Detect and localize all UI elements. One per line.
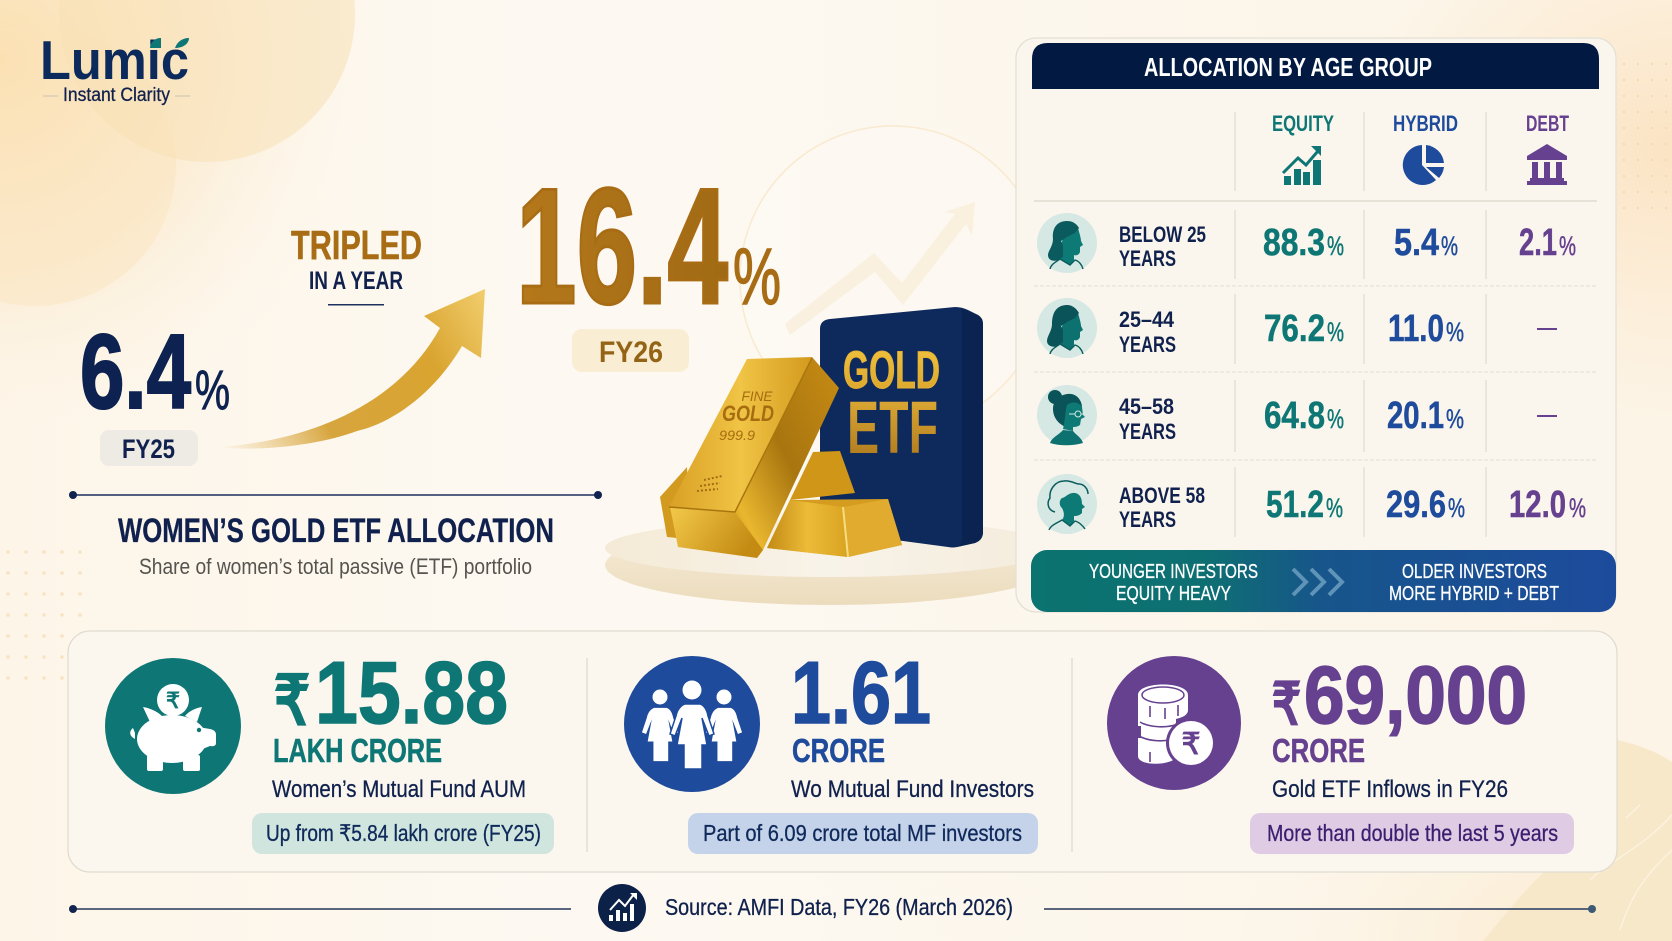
panel heading: ALLOCATION BY AGE GROUP <box>1144 52 1432 82</box>
banner: younger vs older investors: EQUITY HEAVY <box>1116 582 1231 605</box>
stat: women's mutual fund AUM: Women’s Mutual Fund AUM <box>272 776 526 803</box>
stat: 6.4% FY25: % <box>195 358 230 421</box>
stat: women mutual fund investors: CRORE <box>792 732 885 769</box>
row: below 25 years: % <box>1441 231 1458 261</box>
footer: source: Source: AMFI Data, FY26 (March 2026) <box>665 894 1013 920</box>
gold bar: back left <box>660 467 690 538</box>
book: gold ETF: GOLD <box>843 341 940 400</box>
row: 25-44 years: 25–44 <box>1119 307 1175 332</box>
stat: women's mutual fund AUM: 15.88 <box>315 643 508 742</box>
stat: 16.4% FY26: FY26 <box>599 336 663 369</box>
row: 45-58 years: YEARS <box>1119 419 1176 444</box>
row: below 25 years: 2.1 <box>1519 222 1557 264</box>
stat: women mutual fund investors: Part of 6.09 crore total MF investors <box>703 820 1022 846</box>
banner: younger vs older investors <box>1031 550 1616 612</box>
row: 45-58 years: 20.1 <box>1387 395 1444 437</box>
heading: women's gold ETF allocation: WOMEN’S GOLD ETF ALLOCATION <box>118 512 554 550</box>
stat: women's mutual fund AUM <box>105 643 554 854</box>
callout: tripled in a year: IN A YEAR <box>309 267 403 295</box>
stat: gold ETF inflows: 69,000 <box>1304 650 1527 741</box>
row: below 25 years: 5.4 <box>1394 222 1439 264</box>
banner: younger vs older investors: MORE HYBRID + DEBT <box>1389 582 1559 605</box>
row: 45-58 years: 45–58 <box>1119 394 1174 419</box>
icon: three women <box>624 656 760 792</box>
row: above 58 years: 51.2 <box>1266 484 1324 526</box>
stat: women mutual fund investors: Wo Mutual Fund Investors <box>791 776 1034 803</box>
row: 45-58 years: % <box>1446 404 1464 434</box>
avatar: adult woman <box>1037 298 1097 358</box>
gold bar: main: GOLD <box>722 401 774 426</box>
avatar: young woman <box>1037 213 1097 273</box>
gold bar: lower <box>767 499 902 557</box>
row: below 25 years: % <box>1327 231 1344 261</box>
column header: debt: DEBT <box>1526 111 1569 136</box>
heading: women's gold ETF allocation <box>69 491 602 579</box>
stat: women's mutual fund AUM: ₹ <box>274 663 310 739</box>
row: above 58 years: 12.0 <box>1509 484 1566 526</box>
row: 45-58 years: 64.8 <box>1264 395 1325 437</box>
illustration: faint growth arrow in halo <box>740 126 1046 432</box>
icon: piggy bank: ₹ <box>166 688 180 713</box>
column header: hybrid <box>1393 111 1458 185</box>
row: above 58 years: % <box>1448 493 1465 523</box>
icon: coin stack <box>1107 656 1241 790</box>
gold bar: main: 999.9 <box>719 427 755 443</box>
stat: gold ETF inflows: More than double the last 5 years <box>1267 820 1558 846</box>
row: 25-44 years <box>1037 298 1557 358</box>
row: below 25 years: % <box>1559 231 1576 261</box>
footer: source <box>69 884 1596 932</box>
avatar: woman with bun and glasses <box>1037 385 1097 445</box>
book: gold ETF <box>820 307 983 548</box>
panel: key figures <box>68 631 1617 872</box>
row: above 58 years <box>1037 474 1586 534</box>
stat: 16.4% FY26: % <box>733 232 781 321</box>
arrow: growth <box>217 289 485 449</box>
column header: equity <box>1272 111 1334 185</box>
stat: gold ETF inflows <box>1107 650 1574 854</box>
row: 25-44 years: % <box>1446 317 1464 347</box>
stat: 6.4% FY25: FY25 <box>122 434 175 464</box>
column header: debt <box>1526 111 1569 185</box>
avatar: older woman <box>1037 474 1097 534</box>
row: 25-44 years: % <box>1327 317 1344 347</box>
row: above 58 years: ABOVE 58 <box>1119 483 1205 508</box>
banner: younger vs older investors: YOUNGER INVESTORS <box>1089 560 1258 583</box>
row: 25-44 years: 11.0 <box>1388 308 1444 350</box>
logo: Lumic <box>40 29 189 91</box>
row: below 25 years: 88.3 <box>1263 222 1325 264</box>
row: above 58 years: YEARS <box>1119 507 1176 532</box>
icon: coin stack: ₹ <box>1181 728 1201 761</box>
banner: younger vs older investors: OLDER INVESTORS <box>1402 560 1547 583</box>
row: below 25 years: YEARS <box>1119 246 1176 271</box>
gold bar: main <box>669 357 839 558</box>
row: 25-44 years: 76.2 <box>1264 308 1325 350</box>
gold bar: small upper <box>790 451 855 500</box>
arrow: chevrons <box>1293 569 1342 595</box>
stat: women's mutual fund AUM: LAKH CRORE <box>273 732 442 769</box>
column header: hybrid: HYBRID <box>1393 111 1458 136</box>
row: above 58 years: 29.6 <box>1386 484 1446 526</box>
row: above 58 years: % <box>1569 493 1586 523</box>
row: below 25 years: BELOW 25 <box>1119 222 1206 247</box>
stat: gold ETF inflows: CRORE <box>1272 732 1365 769</box>
stat: gold ETF inflows: Gold ETF Inflows in FY26 <box>1272 776 1508 803</box>
panel heading <box>1032 43 1599 89</box>
row: 45-58 years <box>1037 385 1557 445</box>
stat: women's mutual fund AUM: Up from ₹5.84 lakh crore (FY25) <box>266 820 541 846</box>
stat: 6.4% FY25: 6.4 <box>80 313 191 431</box>
row: below 25 years <box>1037 213 1576 273</box>
stat: women mutual fund investors <box>624 643 1038 854</box>
panel: allocation by age group <box>1016 38 1616 612</box>
stat: 16.4% FY26: 16.4 <box>516 154 728 338</box>
stat: gold ETF inflows: ₹ <box>1272 672 1301 737</box>
row: above 58 years: % <box>1326 493 1343 523</box>
stat: women mutual fund investors: 1.61 <box>791 643 931 742</box>
illustration: gold bars on podium <box>605 307 1055 605</box>
row: 45-58 years: % <box>1327 404 1344 434</box>
column header: equity: EQUITY <box>1272 111 1334 136</box>
book: gold ETF: ETF <box>847 386 938 469</box>
icon: piggy bank <box>105 658 241 794</box>
logo: Instant Clarity <box>63 85 170 106</box>
callout: tripled in a year: TRIPLED <box>291 222 422 268</box>
podium <box>605 519 1055 605</box>
callout: tripled in a year <box>291 222 422 306</box>
gold bar: main: FINE <box>742 388 773 404</box>
icon: chart <box>598 884 646 932</box>
heading: women's gold ETF allocation: Share of women’s total passive (ETF) portfolio <box>139 554 532 579</box>
row: 25-44 years: YEARS <box>1119 332 1176 357</box>
